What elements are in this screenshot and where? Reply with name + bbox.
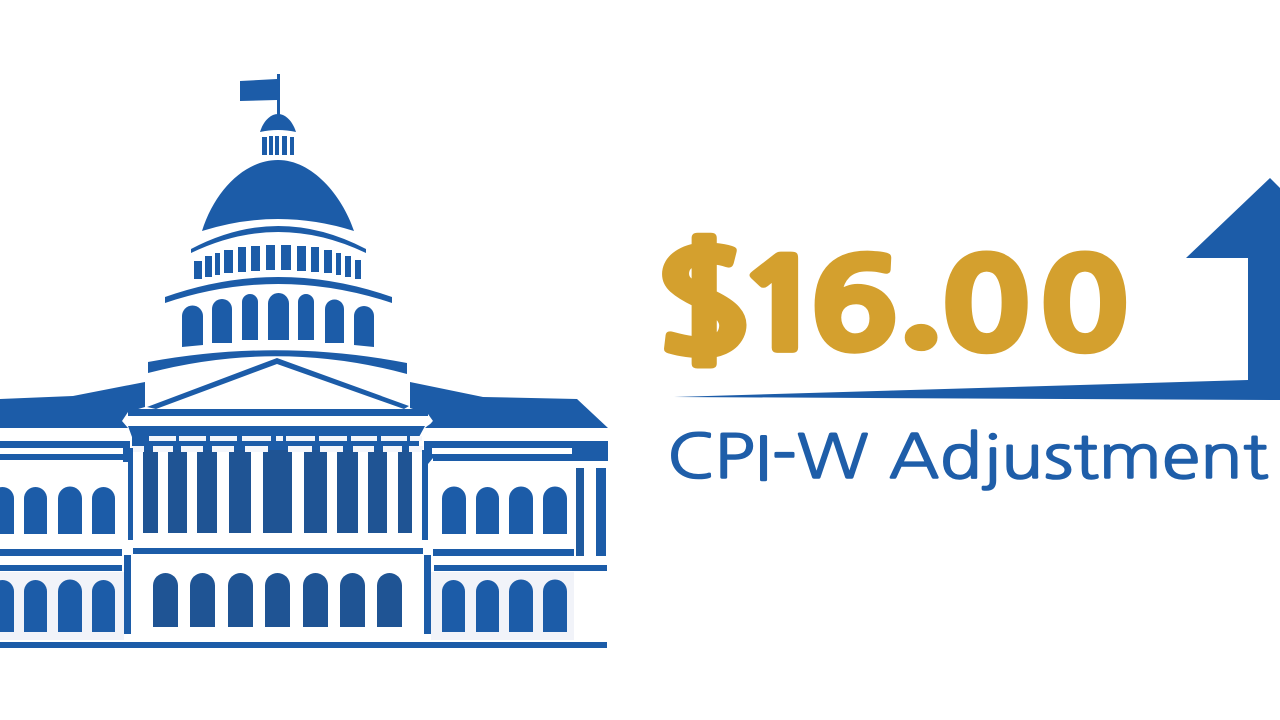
right wing lower storey (431, 572, 574, 640)
right wing upper storey (422, 441, 608, 571)
cupola (260, 114, 296, 155)
icon: capitol building (0, 74, 608, 648)
left wing roof (0, 382, 145, 428)
central columns (132, 446, 423, 533)
ground line (0, 642, 607, 648)
label: CPI-W Adjustment: CPI-W Adjustment (667, 427, 1268, 490)
portico pediment (128, 350, 428, 416)
arrow: rising line with arrowhead (674, 178, 1280, 400)
amount: $16.00: 16.00 (737, 233, 1128, 368)
central lower storey (124, 548, 431, 634)
left wing upper storey (0, 441, 133, 571)
left wing lower storey (0, 572, 124, 640)
dome drum with windows (191, 226, 366, 279)
icon: flag on pole (240, 74, 280, 116)
amount: $16.00: $ (653, 234, 755, 375)
right wing roof (410, 382, 608, 428)
arched colonnade under dome (165, 277, 392, 347)
main dome (202, 160, 354, 231)
central cornice and frieze (126, 416, 432, 452)
